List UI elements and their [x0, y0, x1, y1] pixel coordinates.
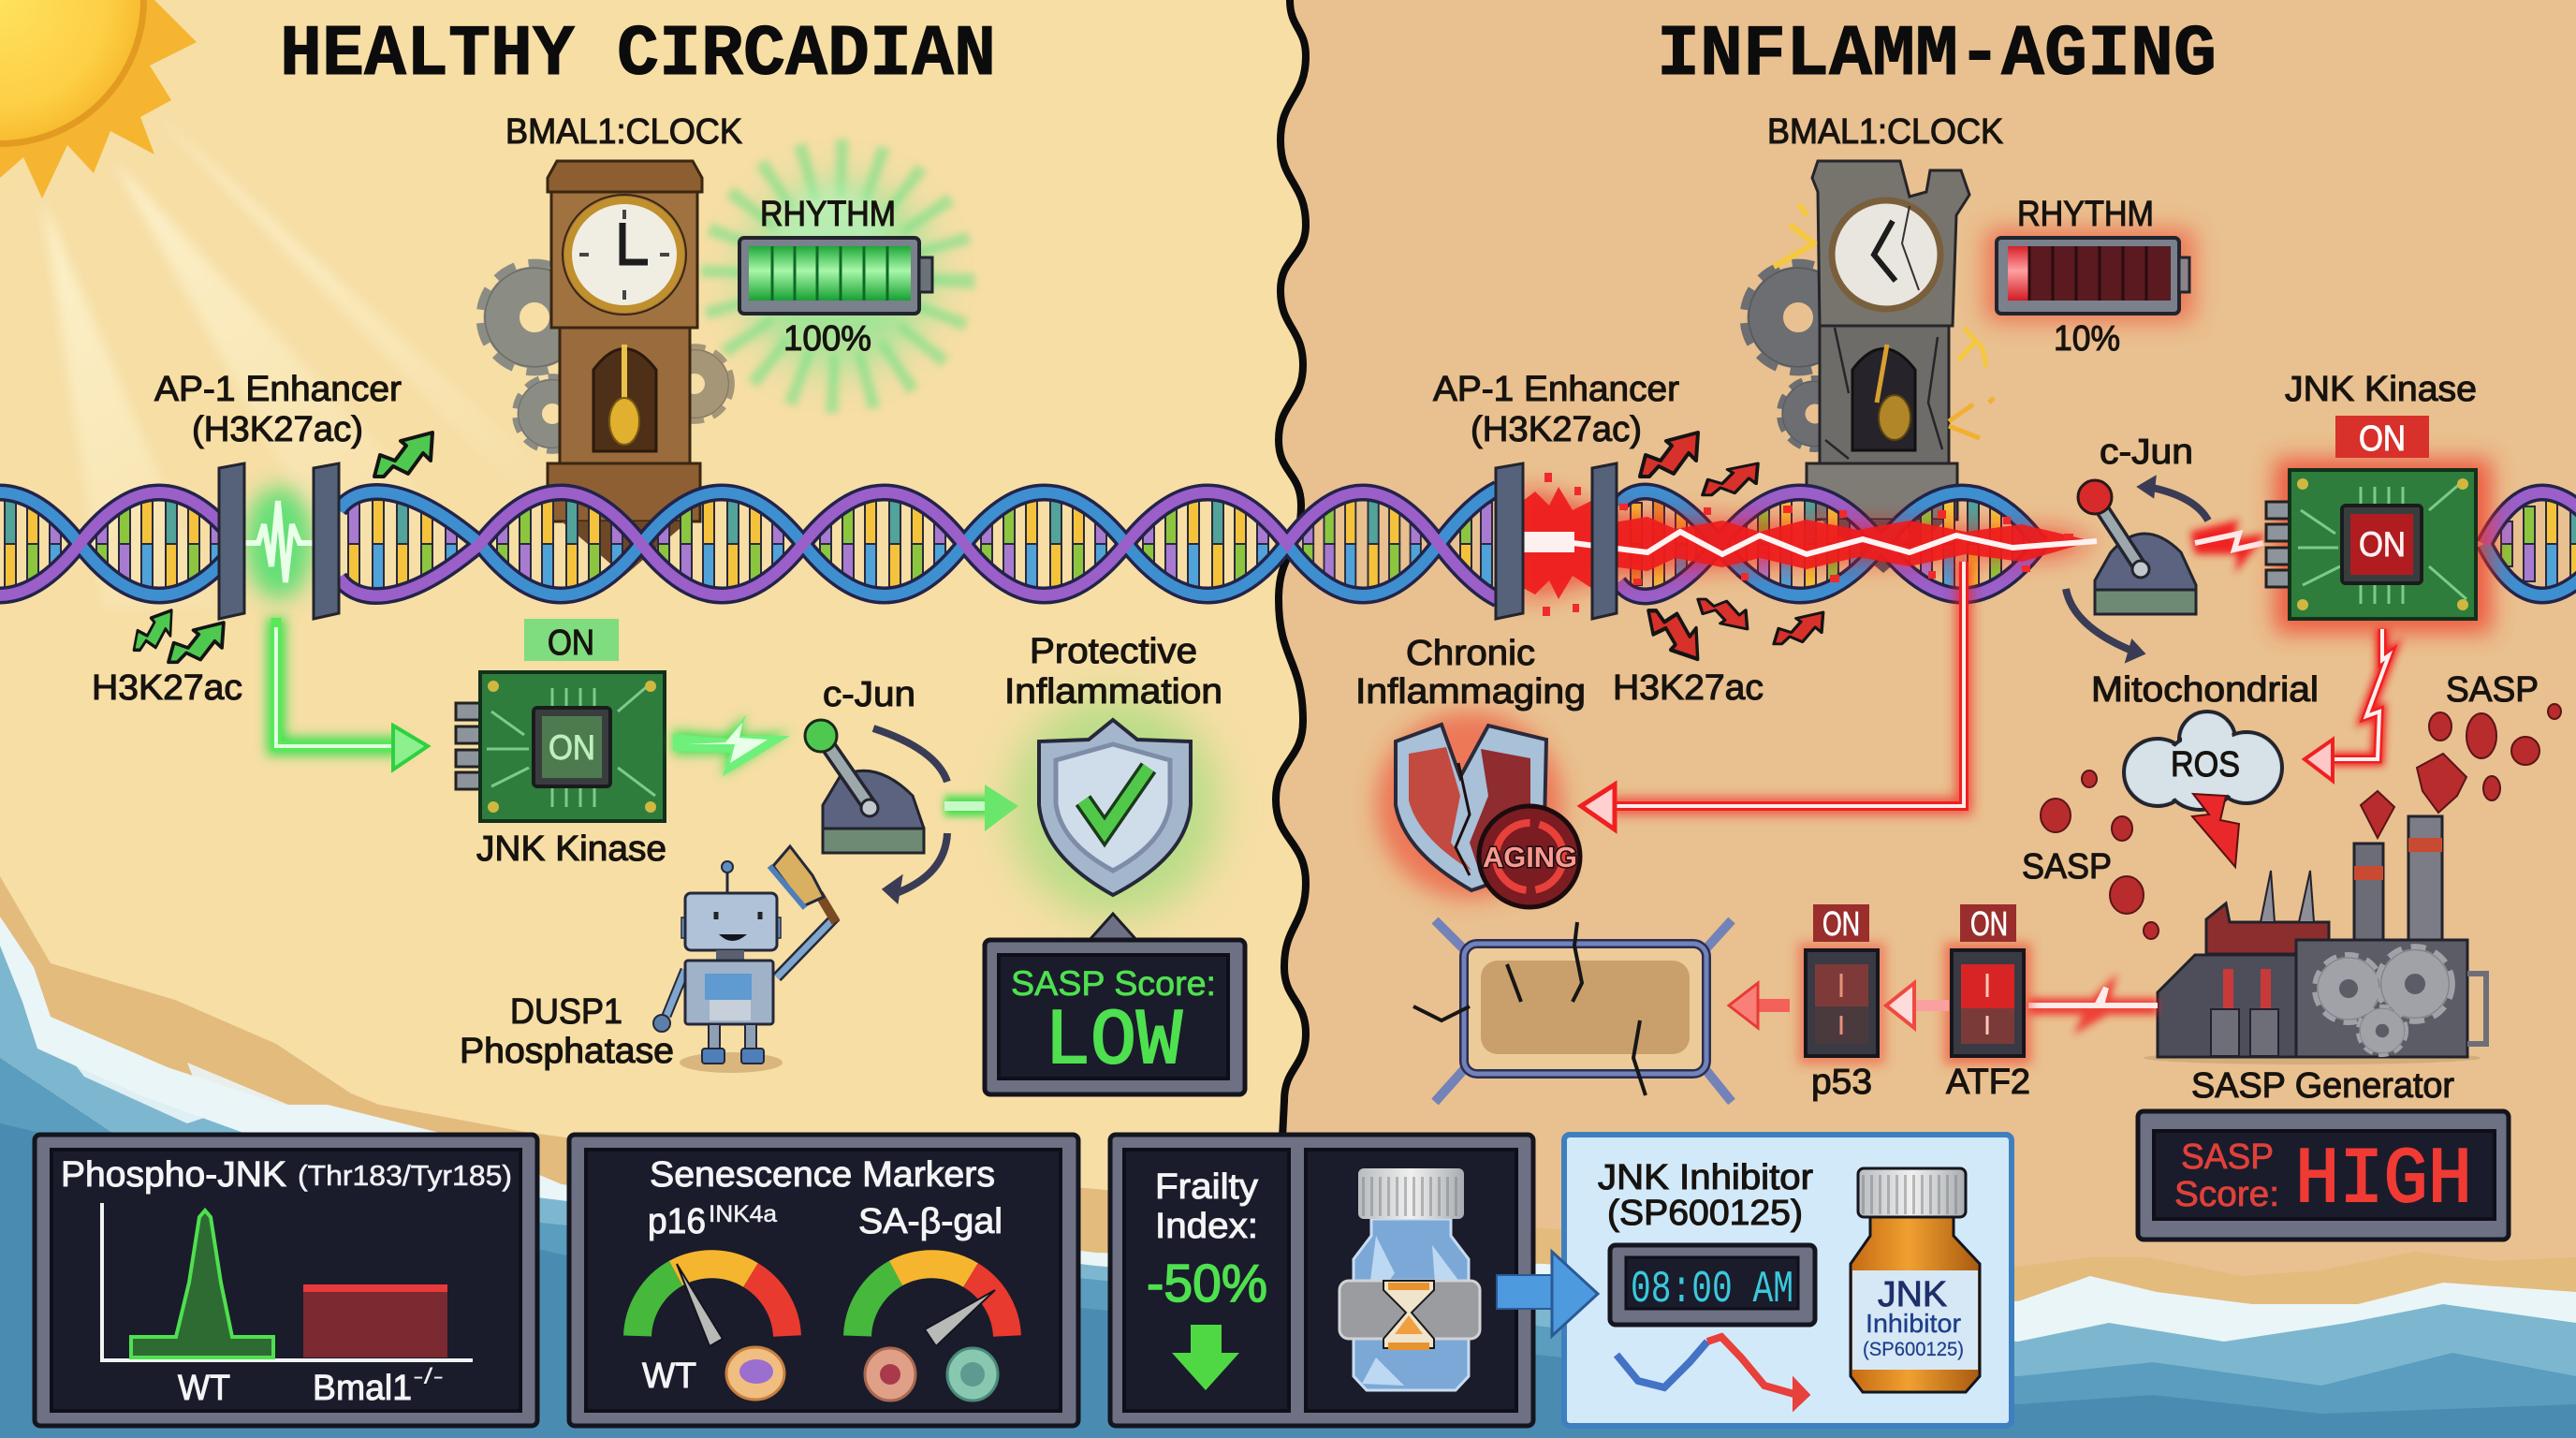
icon: amber inhibitor bottle: (SP600125)	[1863, 1339, 1964, 1360]
label: AP-1 enhancer healthy	[154, 370, 402, 449]
arrow: vial to JNK inhibitor	[1497, 1252, 1598, 1336]
icon: ROS cloud with bolt: ROS	[2171, 745, 2240, 785]
label: p53: p53	[1811, 1063, 1872, 1102]
water: left shore and bottom sea	[0, 876, 2576, 1438]
title: inflamm-aging: INFLAMM-AGING	[1657, 15, 2217, 96]
arrow: ATF2 to p53	[1886, 983, 1949, 1028]
label: BMAL1:CLOCK healthy: BMAL1:CLOCK	[505, 112, 742, 152]
panel: senescence markers: p16	[648, 1202, 706, 1241]
badge: ON aging: ON	[2359, 419, 2406, 459]
label: AP-1 enhancer aging: (H3K27ac)	[1471, 410, 1642, 449]
label: mitochondrial: Mitochondrial	[2091, 670, 2319, 710]
label: H3K27ac aging: H3K27ac	[1613, 668, 1764, 708]
arrow: green from enhancer to JNK	[276, 618, 428, 770]
digital clock	[1610, 1245, 1815, 1325]
icon: cracked senescent cell	[1413, 920, 1732, 1102]
label: 10 percent: 10%	[2054, 319, 2120, 359]
label: AP-1 enhancer aging: AP-1 Enhancer	[1433, 370, 1679, 409]
label: chronic inflammaging: Chronic	[1406, 634, 1535, 673]
label: SASP upper: SASP	[2446, 670, 2539, 710]
chip: JNK kinase aging: ON	[2359, 525, 2406, 564]
badge: p53 ON: ON	[1822, 904, 1860, 943]
panel: SASP score high	[2138, 1111, 2509, 1240]
icon: cracked shield with aging seal: AGING	[1483, 841, 1577, 873]
panel: JNK inhibitor treatment: JNK Inhibitor	[1598, 1158, 1813, 1197]
icon: green acetylation marks	[134, 433, 432, 662]
label: DUSP1 phosphatase	[460, 992, 674, 1071]
panel: SASP score low	[985, 914, 1245, 1094]
label: protective inflammation	[1004, 632, 1222, 712]
arrow: red laser through DNA	[1523, 473, 2097, 616]
DNA double helix	[0, 489, 2576, 599]
label: rhythm aging: RHYTHM	[2017, 195, 2154, 234]
digital clock: 08:00 AM	[1631, 1265, 1793, 1315]
panel: frailty index with vial: -50%	[1147, 1254, 1267, 1313]
label: rhythm healthy: RHYTHM	[760, 195, 896, 234]
badge: ON healthy	[524, 619, 619, 663]
panel: senescence markers: Senescence Markers	[650, 1155, 995, 1195]
icon: broken grandfather clock	[1749, 161, 1994, 573]
label: protective inflammation: Protective	[1030, 632, 1197, 671]
icon: ROS cloud with bolt	[2124, 712, 2282, 867]
label: DUSP1 phosphatase: DUSP1	[510, 992, 622, 1032]
panel: frailty index with vial: Frailty	[1155, 1167, 1258, 1207]
arrow: red laser to aging shield	[1581, 562, 1964, 829]
switch: ATF2	[1944, 943, 2031, 1064]
icon: protective shield	[1010, 697, 1220, 917]
icon: red rhythm battery	[1984, 228, 2195, 322]
icon: healthy enhancer plates and green pulse	[219, 463, 339, 619]
arrow: green to shield	[944, 785, 1018, 831]
icon: amber inhibitor bottle: JNK	[1878, 1275, 1947, 1314]
gauge: p16	[637, 1264, 787, 1346]
panel: SASP score low: LOW	[1045, 998, 1183, 1087]
badge: ON aging	[2335, 416, 2429, 459]
panel: SASP score low: SASP Score:	[1011, 964, 1216, 1003]
panel: frailty index with vial	[1110, 1135, 1533, 1426]
label: AP-1 enhancer aging	[1433, 370, 1679, 449]
chip: JNK kinase healthy	[456, 672, 665, 821]
panel: frailty index with vial: Index:	[1155, 1207, 1258, 1246]
label: H3K27ac healthy: H3K27ac	[92, 668, 242, 708]
panel: phospho-JNK chart: (Thr183/Tyr185)	[298, 1159, 512, 1192]
label: JNK kinase healthy: JNK Kinase	[476, 829, 666, 869]
gauge: SA-beta-gal	[857, 1264, 1007, 1346]
lever: c-Jun healthy	[805, 720, 947, 901]
arrow: p53 to cell	[1729, 983, 1790, 1028]
chip: JNK kinase aging	[2266, 459, 2492, 633]
icon: cracked shield with aging seal	[1376, 712, 1580, 907]
label: BMAL1:CLOCK aging: BMAL1:CLOCK	[1767, 112, 2003, 152]
icon: SASP generator factory	[2144, 816, 2486, 1064]
arrow: red lightning chip to lever	[2190, 520, 2266, 573]
sun with rays	[0, 0, 618, 609]
lever: c-Jun aging	[2066, 477, 2208, 661]
label: c-Jun healthy: c-Jun	[823, 675, 915, 714]
icon: SASP particles	[2041, 704, 2561, 939]
icon: aging enhancer plates	[1496, 463, 1617, 619]
icon: red acetylation marks	[1640, 433, 1823, 659]
label: ATF2: ATF2	[1946, 1063, 2030, 1102]
label: chronic inflammaging	[1355, 634, 1586, 712]
icon: amber inhibitor bottle	[1851, 1168, 1980, 1392]
chip: JNK kinase healthy: ON	[549, 728, 595, 767]
label: AP-1 enhancer healthy: (H3K27ac)	[192, 410, 363, 449]
wavy divider	[1276, 0, 1306, 1137]
arrow: green lightning	[673, 714, 790, 776]
arrow: red bolt to ROS	[2305, 629, 2389, 781]
panel: senescence markers: INK4a	[709, 1201, 777, 1227]
icon: amber inhibitor bottle: Inhibitor	[1866, 1309, 1961, 1338]
panel: JNK inhibitor treatment	[1564, 1135, 2012, 1426]
badge: ATF2 ON: ON	[1970, 904, 2008, 943]
label: 100 percent: 100%	[783, 319, 871, 359]
icon: DUSP1 robot	[653, 846, 836, 1073]
background: inflamm-aging side sand	[1276, 0, 2576, 1438]
label: AP-1 enhancer healthy: AP-1 Enhancer	[154, 370, 402, 409]
panel: JNK inhibitor treatment: (SP600125)	[1607, 1194, 1803, 1233]
badge: ON healthy: ON	[548, 624, 594, 663]
label: SASP lower: SASP	[2022, 847, 2112, 887]
panel: senescence markers: SA-β-gal	[858, 1202, 1003, 1241]
panel: phospho-JNK chart	[35, 1135, 537, 1426]
panel: senescence markers: WT	[642, 1357, 696, 1396]
panel: SASP score high: HIGH	[2295, 1137, 2472, 1225]
panel: senescence markers	[569, 1135, 1078, 1426]
icon: green rhythm battery with glow	[730, 169, 945, 384]
label: SASP generator: SASP Generator	[2191, 1066, 2454, 1106]
label: c-Jun aging: c-Jun	[2100, 433, 2193, 472]
panel: phospho-JNK chart: Phospho-JNK	[61, 1155, 286, 1195]
panel: phospho-JNK chart: Bmal1	[313, 1369, 412, 1408]
label: DUSP1 phosphatase: Phosphatase	[460, 1032, 674, 1071]
panel: phospho-JNK chart: -/-	[413, 1364, 444, 1389]
panel: SASP score high: Score:	[2174, 1175, 2279, 1214]
title: healthy circadian: HEALTHY CIRCADIAN	[280, 15, 996, 96]
label: chronic inflammaging: Inflammaging	[1355, 672, 1586, 712]
panel: phospho-JNK chart: WT	[178, 1369, 230, 1408]
arrow: red bolt factory to ATF2	[2028, 974, 2158, 1034]
rhythm shift wave	[1617, 1337, 1809, 1410]
icon: glass vial with hourglass	[1339, 1168, 1480, 1390]
panel: SASP score high: SASP	[2181, 1137, 2274, 1177]
label: JNK kinase aging: JNK Kinase	[2285, 370, 2477, 409]
switch: p53	[1798, 943, 1885, 1064]
icon: healthy grandfather clock	[485, 161, 728, 576]
label: protective inflammation: Inflammation	[1004, 672, 1222, 712]
